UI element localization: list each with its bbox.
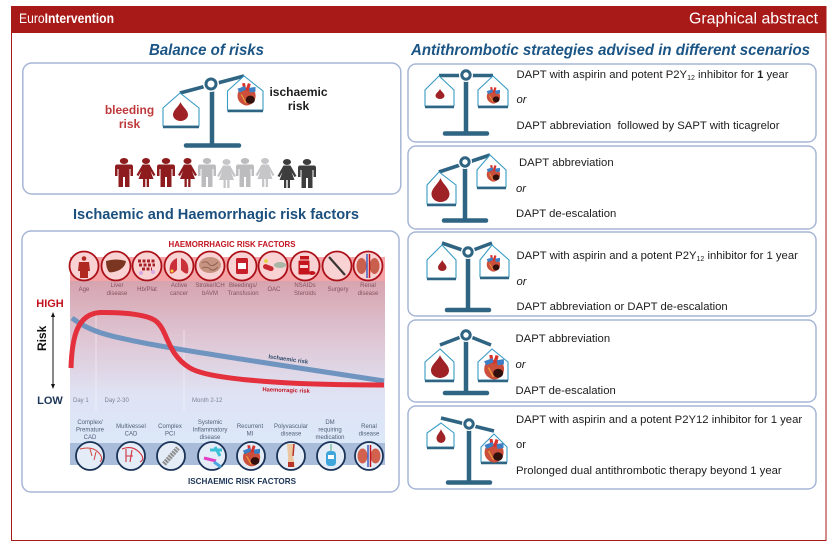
ischaemic strip: [70, 443, 385, 465]
haemorrhagic factor labels: Transfusion: [227, 291, 259, 297]
icon: complex CAD: [76, 442, 104, 470]
heading: haemorrhagic risk factors: HAEMORRHAGIC RISK FACTORS: [168, 240, 296, 249]
time labels: Month 2-12: [192, 398, 223, 404]
icon: raised scale small weights: [427, 243, 509, 310]
panel: scenario 4: [408, 320, 816, 402]
axis label: high: HIGH: [36, 298, 64, 310]
text: scenario 1: DAPT abbreviation followed by SAPT with ticagrelor: [516, 120, 780, 132]
ischaemic factor labels: CAD: [125, 432, 138, 438]
text: scenario 2: [516, 157, 616, 220]
label: ischaemic risk curve: Ischaemic risk: [268, 354, 309, 366]
graphical abstract label: Graphical abstract: [689, 10, 819, 28]
panel: scenario 2: [408, 146, 816, 229]
label: bleeding risk: bleeding: [105, 103, 154, 117]
ischaemic factor labels: medication: [315, 435, 345, 441]
ischaemic factor labels: disease: [200, 435, 221, 441]
haemorrhagic icons: [70, 252, 382, 280]
haemorrhagic factor labels: Liver: [110, 283, 124, 289]
icon: main scale: [163, 76, 263, 146]
ischaemic factor labels: Polyvascular: [274, 424, 308, 430]
icon: lungs: [164, 252, 194, 280]
haemorrhagic factor labels: Surgery: [327, 287, 349, 293]
ischaemic factor labels: Renal: [361, 424, 377, 430]
icon: level scale small weights: [425, 68, 508, 134]
axis arrow: [51, 312, 55, 389]
heading: balance of risks: Balance of risks: [149, 42, 264, 59]
panel: scenario 3: [408, 232, 816, 316]
text: scenario 5: DAPT with aspirin and a potent P2Y12 inhibitor for 1 year: [516, 414, 802, 426]
journal name: EuroIntervention: [19, 11, 114, 26]
label: ischaemic risk: ischaemic: [269, 85, 328, 99]
ischaemic factor labels: Systemic: [198, 420, 222, 426]
haemorrhagic factor labels: Renal: [360, 283, 376, 289]
icon: inflammation: [198, 442, 226, 470]
ischaemic factor labels: Inflammatory: [193, 428, 227, 434]
text: scenario 1: DAPT with aspirin and potent P2Y: [516, 69, 687, 81]
time labels: Day 1: [73, 398, 89, 404]
icon: multivessel CAD: [117, 442, 145, 470]
text: scenario 3: inhibitor for 1 year: [704, 250, 798, 262]
text: scenario 1: 1 year: [757, 69, 788, 81]
ischaemic factor labels: MI: [247, 432, 254, 438]
icon: scale tipped to bleeding: [427, 155, 506, 220]
text: scenario 1: 12: [687, 75, 695, 82]
label: bleeding risk: risk: [119, 117, 140, 131]
haemorrhagic factor labels: NSAIDs: [294, 283, 316, 289]
ischaemic factor labels: disease: [359, 432, 380, 438]
icon: OAC pills: [258, 252, 288, 280]
haemorrhagic factor labels: Bleedings/: [229, 283, 257, 289]
ischaemic factor labels: disease: [281, 432, 302, 438]
time dividers: [96, 310, 184, 410]
text: scenario 3: DAPT with aspirin and a potent P2Y: [516, 250, 697, 262]
heading: antithrombotic strategies: Antithrombotic strategies advised in different scenarios: [410, 42, 810, 59]
ischaemic icons: [76, 442, 383, 470]
haemorrhagic strip: [70, 257, 385, 281]
icon: surgery scalpel: [322, 252, 352, 280]
icon: kidneys: [355, 442, 383, 470]
ischaemic factor labels: Multivessel: [116, 424, 146, 430]
text: scenario 1: [516, 69, 789, 132]
panel: risk factors chart: [22, 231, 399, 492]
haemorrhagic factor labels: disease: [107, 291, 128, 297]
haemorrhagic factor labels: [79, 283, 379, 297]
icon: scale tipped to ischaemia: [427, 417, 507, 482]
haemorrhagic factor labels: Steroids: [294, 291, 316, 297]
label: haemorrhagic risk curve: Haemorragic risk: [262, 387, 311, 395]
panel: scenario 5: [408, 406, 816, 489]
icon: NSAIDs bottle: [290, 252, 320, 280]
text: scenario 4: DAPT de-escalation: [516, 385, 616, 397]
text: scenario 2: DAPT abbreviation: [519, 157, 614, 169]
icon: polyvascular vessel: [277, 442, 305, 470]
haemorrhagic factor labels: cancer: [170, 291, 188, 297]
panel: scenario 1: [408, 64, 816, 142]
text: scenario 1: inhibitor for: [695, 69, 757, 81]
text: scenario 4: [516, 333, 616, 397]
axis label: risk: Risk: [35, 325, 49, 351]
icon: stent: [157, 442, 185, 470]
ischaemic factor labels: CAD: [84, 435, 97, 441]
chart background: [70, 280, 385, 445]
icon: recurrent MI heart: [237, 442, 265, 470]
text: scenario 4: or: [516, 359, 527, 371]
time labels: [73, 398, 223, 404]
text: scenario 1: or: [516, 94, 528, 106]
time labels: Day 2-30: [104, 398, 130, 404]
text: scenario 3: [516, 250, 798, 313]
text: scenario 5: [516, 414, 802, 477]
ischaemic factor labels: PCI: [165, 432, 175, 438]
haemorrhagic factor labels: disease: [358, 291, 379, 297]
icon: liver: [102, 252, 130, 280]
ischaemic factor labels: requiring: [318, 428, 342, 434]
icon: brain: [196, 252, 224, 280]
text: scenario 4: DAPT abbreviation: [516, 333, 610, 345]
icon: patient group: [115, 158, 316, 188]
ischaemic factor labels: [76, 420, 380, 441]
heading: ischaemic risk factors: ISCHAEMIC RISK FACTORS: [188, 477, 297, 486]
text: scenario 2: or: [516, 183, 527, 195]
panel: balance of risks: [23, 63, 401, 194]
icon: age: [70, 252, 98, 280]
axis label: low: LOW: [37, 395, 63, 407]
text: scenario 5: or: [516, 439, 526, 451]
curve: ischaemic risk: [72, 318, 384, 381]
ischaemic factor labels: Premature: [76, 428, 105, 434]
label: ischaemic risk: risk: [288, 99, 309, 113]
text: scenario 2: DAPT de-escalation: [516, 208, 616, 220]
heading: risk factors: Ischaemic and Haemorrhagic risk factors: [73, 207, 359, 223]
ischaemic factor labels: Complex: [158, 424, 182, 430]
icon: kidneys: [354, 252, 382, 280]
haemorrhagic factor labels: Hb/Plat: [137, 287, 157, 293]
curve: haemorrhagic risk: [71, 312, 384, 385]
haemorrhagic factor labels: Age: [79, 287, 90, 293]
text: scenario 3: 12: [697, 256, 704, 263]
haemorrhagic factor labels: OAC: [267, 287, 281, 293]
haemorrhagic factor labels: Stroke/ICH: [195, 283, 225, 289]
icon: blood cells: [132, 252, 162, 280]
haemorrhagic factor labels: bAVM: [202, 291, 218, 297]
ischaemic factor labels: Recurrent: [237, 424, 263, 430]
icon: lowered scale large weights: [425, 328, 508, 393]
haemorrhagic factor labels: Active: [171, 283, 187, 289]
header bar: [11, 6, 826, 33]
text: scenario 3: or: [516, 276, 528, 288]
icon: blood bag: [228, 252, 256, 280]
text: scenario 3: DAPT abbreviation or DAPT de-escalation: [516, 301, 728, 313]
ischaemic factor labels: Complex/: [77, 420, 103, 426]
icon: glucose meter: [317, 442, 345, 470]
text: scenario 5: Prolonged dual antithrombotic therapy beyond 1 year: [516, 465, 782, 477]
ischaemic factor labels: DM: [325, 420, 335, 426]
